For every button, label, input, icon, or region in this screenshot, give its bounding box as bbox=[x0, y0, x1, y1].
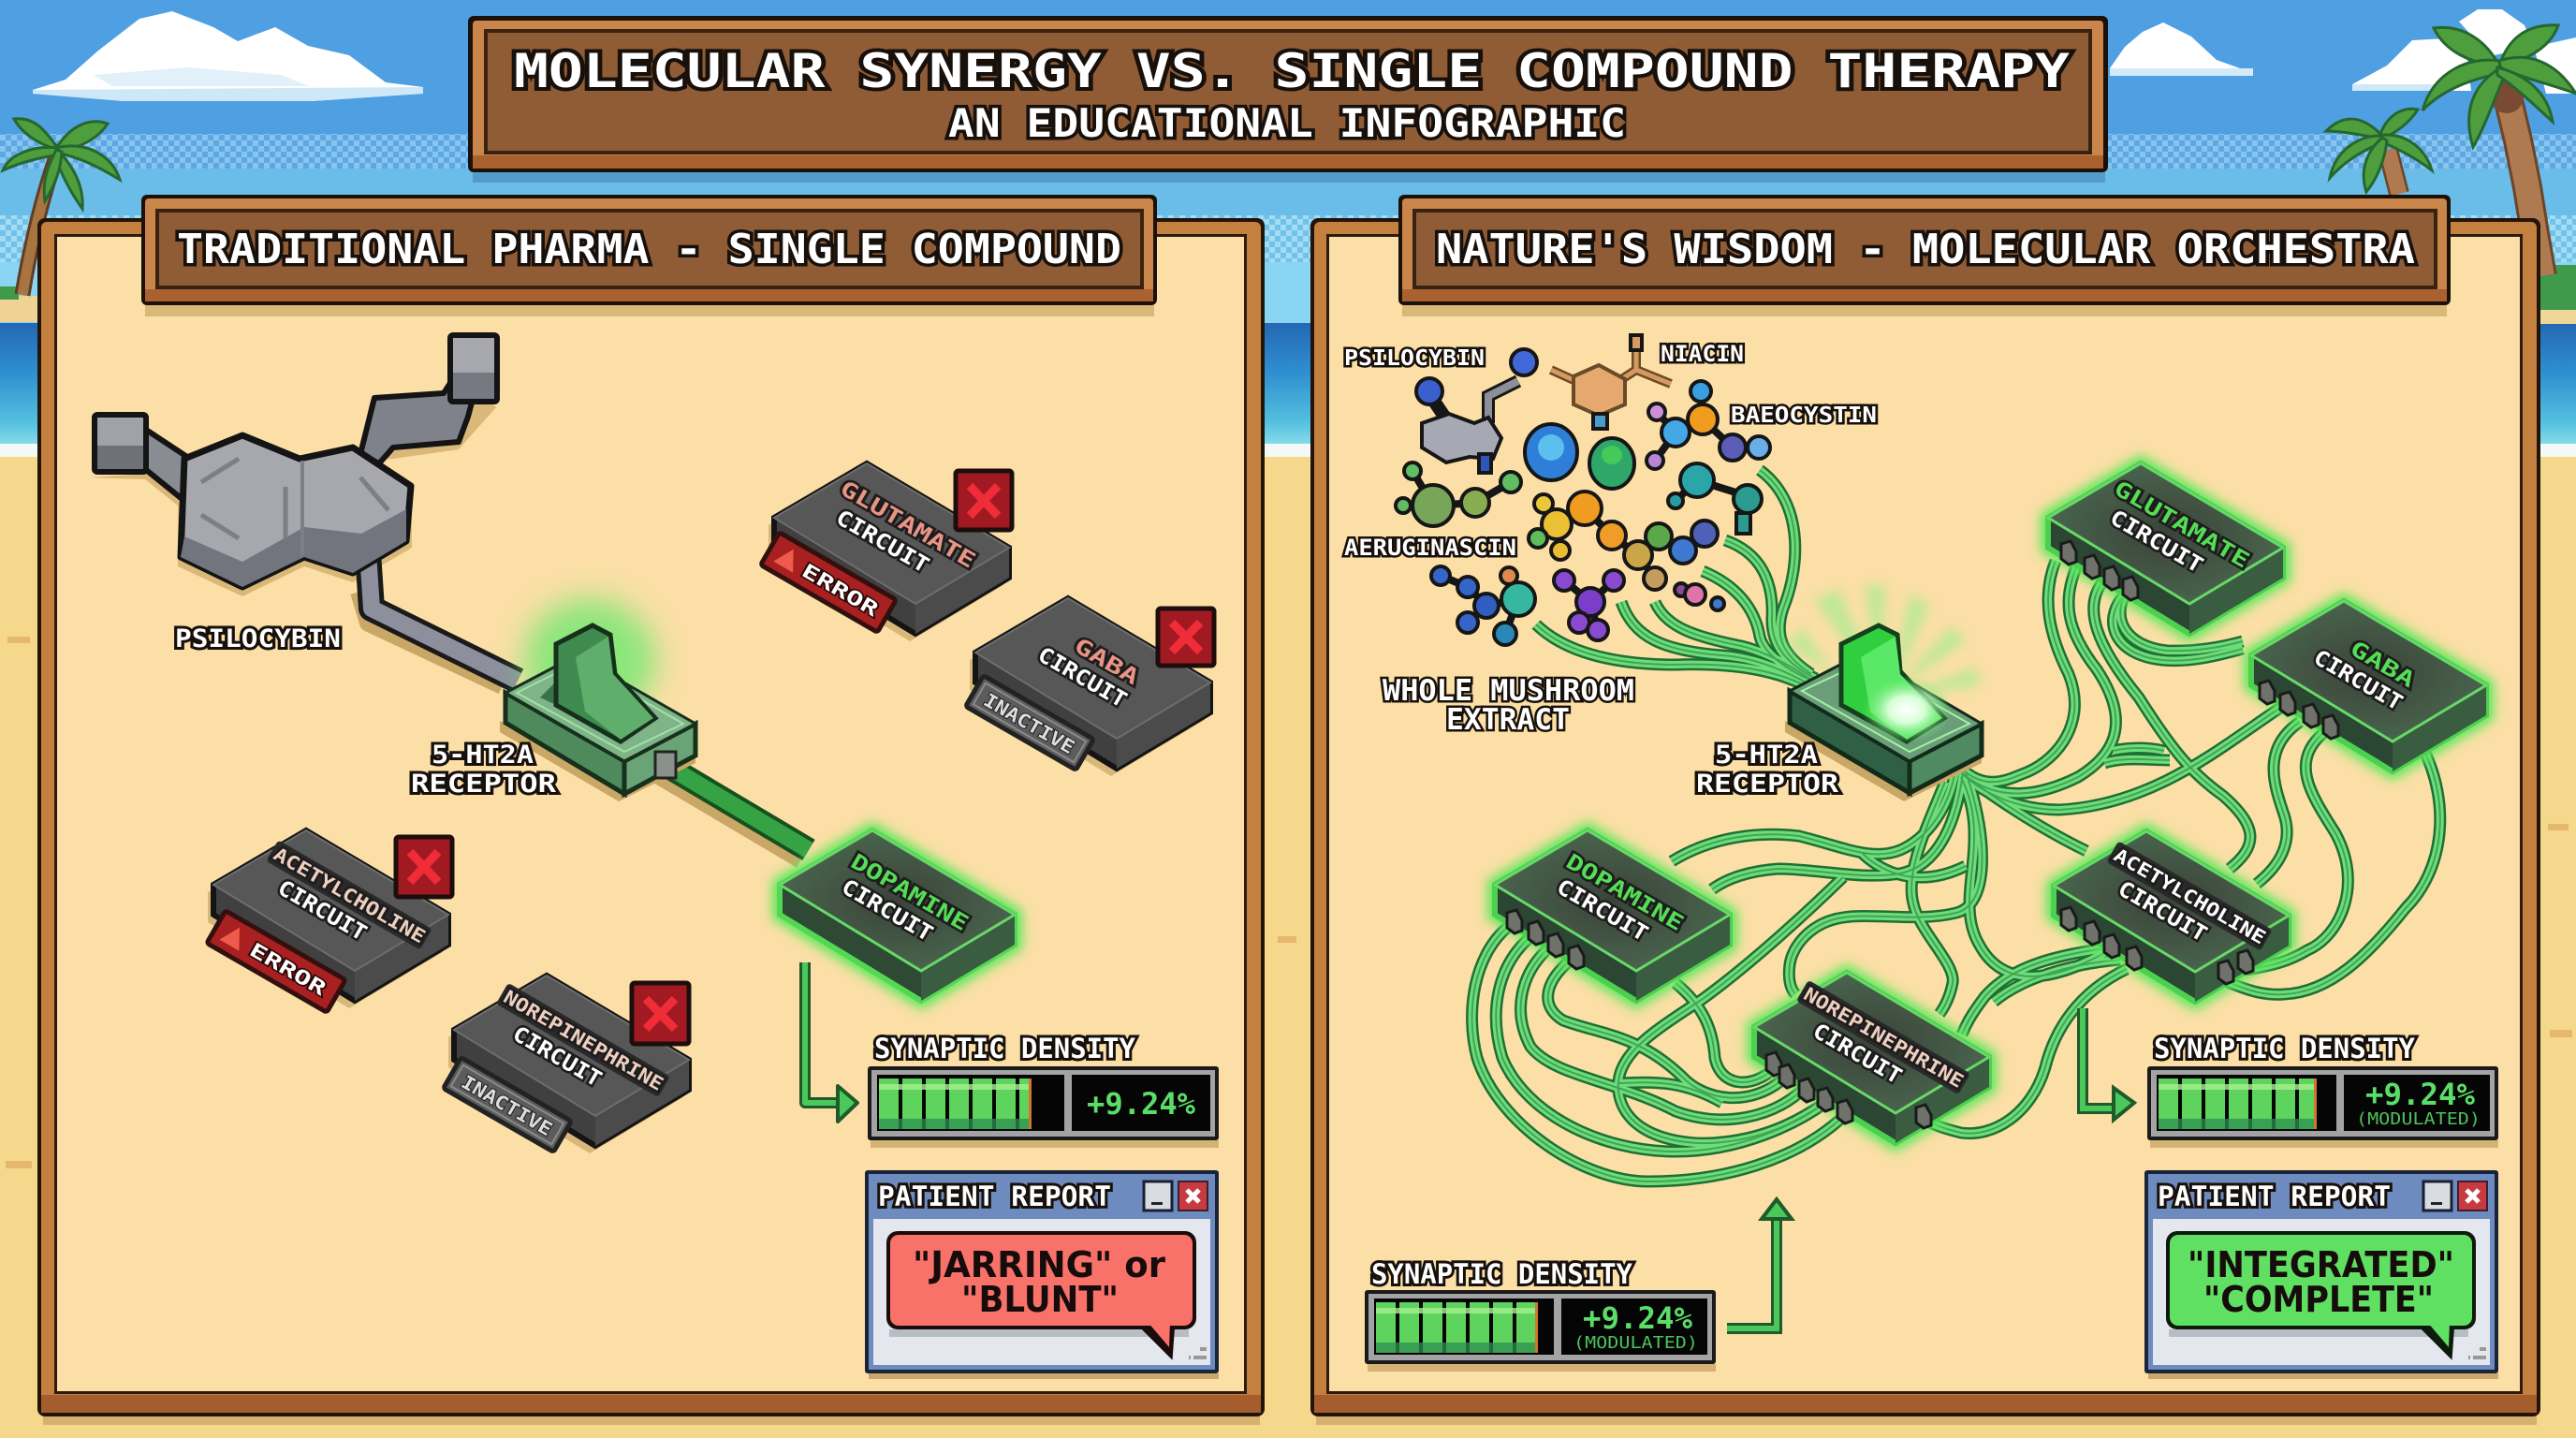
circuit: gaba inactive bbox=[966, 598, 1214, 776]
circuit: gaba active bbox=[2251, 601, 2486, 771]
panel header: traditional pharma: TRADITIONAL PHARMA - SINGLE COMPOUND bbox=[177, 226, 1121, 273]
circuit: acetylcholine inactive: CIRCUIT bbox=[273, 876, 371, 946]
circuit: norepinephrine inactive: NOREPINEPHRINE bbox=[500, 986, 667, 1095]
subtitle text: AN EDUCATIONAL INFOGRAPHIC bbox=[948, 100, 1626, 146]
circuit: dopamine active bbox=[780, 830, 1015, 1001]
arrow: to synaptic density right bbox=[2083, 1008, 2134, 1120]
tag: error: ERROR bbox=[798, 559, 883, 622]
icon: minimize button bbox=[2423, 1181, 2452, 1211]
circuit: norepinephrine inactive: CIRCUIT bbox=[508, 1022, 606, 1093]
icon: red x bbox=[1158, 609, 1214, 666]
molecule: teal and blue cluster bbox=[1431, 566, 1535, 645]
speech bubble: integrated complete bbox=[2166, 1231, 2476, 1354]
circuit: acetylcholine inactive bbox=[207, 830, 452, 1012]
value: +9.24%: +9.24% bbox=[1087, 1086, 1196, 1122]
synaptic density meter: modulated right bbox=[2147, 1033, 2498, 1148]
molecule: psilocybin single compound bbox=[89, 335, 518, 685]
value: +9.24% modulated: (MODULATED) bbox=[1573, 1333, 1698, 1353]
molecule: psilocybin gray bbox=[1416, 349, 1537, 473]
arrow: up from lower synaptic density bbox=[1727, 1199, 1792, 1328]
synaptic density meter bbox=[868, 1033, 1219, 1148]
molecule: niacin tan bbox=[1551, 335, 1671, 429]
synaptic density meter: modulated lower bbox=[1365, 1258, 1716, 1372]
circuit: dopamine active bbox=[1495, 830, 1730, 1001]
cloud: right large bbox=[2352, 9, 2576, 94]
speech bubble: jarring or blunt: "BLUNT" bbox=[961, 1279, 1119, 1320]
label: synaptic density: SYNAPTIC DENSITY bbox=[2154, 1033, 2416, 1064]
label: niacin: NIACIN bbox=[1661, 341, 1744, 367]
patient report window: integrated bbox=[2144, 1170, 2498, 1379]
panel header: nature's wisdom: NATURE'S WISDOM - MOLECULAR ORCHESTRA bbox=[1436, 226, 2415, 273]
cloud: left bbox=[33, 11, 423, 101]
circuit: glutamate active: CIRCUIT bbox=[2105, 506, 2207, 579]
arrow: dopamine to synaptic density bbox=[805, 962, 857, 1122]
molecule: purple cluster bbox=[1554, 570, 1624, 640]
circuit: glutamate inactive bbox=[761, 463, 1012, 641]
speech bubble: integrated complete: "INTEGRATED" bbox=[2188, 1244, 2454, 1285]
panel: nature's wisdom bbox=[1310, 195, 2540, 1425]
label: baeocystin: BAEOCYSTIN bbox=[1731, 404, 1877, 428]
label: whole mushroom extract bbox=[1383, 674, 1634, 737]
palm tree: right large bbox=[2422, 25, 2576, 276]
tag: error bbox=[207, 911, 345, 1012]
palm tree: left bbox=[3, 119, 120, 295]
receptor switch: single compound bbox=[500, 599, 695, 801]
wire network: green pathways bbox=[1472, 470, 2440, 1181]
tag: inactive bbox=[444, 1058, 571, 1152]
circuit: glutamate inactive: CIRCUIT bbox=[831, 506, 933, 579]
circuit: acetylcholine active: ACETYLCHOLINE bbox=[2110, 844, 2270, 948]
label: 5-HT2A receptor: 5-HT2A bbox=[1715, 741, 1818, 770]
connector: active green tube bbox=[659, 765, 809, 859]
panel header: nature's wisdom bbox=[1398, 195, 2451, 316]
circuit: gaba active: GABA bbox=[2346, 637, 2419, 693]
circuit: norepinephrine active: CIRCUIT bbox=[1808, 1020, 1906, 1090]
molecule: yellow orange chain bbox=[1529, 492, 1718, 590]
panel header: traditional pharma bbox=[141, 195, 1157, 316]
value: +9.24% modulated bbox=[1573, 1300, 1698, 1353]
circuit: norepinephrine active: NOREPINEPHRINE bbox=[1800, 983, 1968, 1093]
speech bubble: integrated complete: "COMPLETE" bbox=[2203, 1279, 2434, 1320]
label: whole mushroom extract: EXTRACT bbox=[1446, 703, 1570, 737]
palm tree: right small bbox=[2326, 109, 2432, 194]
molecule: baeocystin cluster bbox=[1647, 381, 1770, 469]
circuit: glutamate active: GLUTAMATE bbox=[2110, 477, 2253, 574]
circuit: norepinephrine active bbox=[1754, 973, 1989, 1143]
icon: red x bbox=[632, 983, 689, 1044]
label: 5-HT2A receptor: RECEPTOR bbox=[1696, 770, 1839, 799]
icon: close button bbox=[1178, 1181, 1208, 1211]
label: synaptic density: SYNAPTIC DENSITY bbox=[1371, 1258, 1633, 1290]
label: psilocybin: PSILOCYBIN bbox=[1344, 346, 1485, 371]
speech bubble: jarring or blunt: "JARRING" or bbox=[913, 1244, 1165, 1285]
speech bubble: jarring or blunt bbox=[886, 1231, 1196, 1354]
tag: inactive bbox=[966, 676, 1093, 770]
circuit: dopamine active: DOPAMINE bbox=[1561, 850, 1688, 936]
molecule: blue and green blobs bbox=[1525, 424, 1634, 489]
icon: red x bbox=[396, 837, 452, 897]
circuit: glutamate inactive: GLUTAMATE bbox=[836, 477, 979, 574]
label: 5-HT2A receptor bbox=[411, 741, 557, 799]
circuit: dopamine active: DOPAMINE bbox=[846, 850, 973, 936]
value: +9.24% modulated: +9.24% bbox=[2365, 1077, 2476, 1112]
circuit: acetylcholine active: CIRCUIT bbox=[2114, 877, 2211, 947]
window title: PATIENT REPORT bbox=[2158, 1181, 2391, 1212]
cloud: right small bbox=[2110, 22, 2253, 76]
value: +9.24% modulated: (MODULATED) bbox=[2356, 1109, 2481, 1129]
icon: close button bbox=[2458, 1181, 2487, 1211]
tag: error bbox=[761, 533, 896, 632]
circuit: gaba inactive: GABA bbox=[1070, 634, 1143, 690]
icon: minimize button bbox=[1144, 1181, 1172, 1211]
label: synaptic density: SYNAPTIC DENSITY bbox=[874, 1033, 1136, 1064]
circuit: gaba inactive: CIRCUIT bbox=[1033, 643, 1131, 713]
patient report window: jarring bbox=[865, 1170, 1219, 1379]
molecule: small pink cluster bbox=[1675, 583, 1724, 610]
molecule: aeruginascin green bbox=[1396, 462, 1521, 526]
label: psilocybin: PSILOCYBIN bbox=[175, 624, 341, 653]
circuit: acetylcholine active bbox=[2054, 831, 2289, 1002]
label: 5-HT2A receptor bbox=[1696, 741, 1839, 799]
label: aeruginascin: AERUGINASCIN bbox=[1344, 535, 1516, 561]
tag: inactive: INACTIVE bbox=[458, 1070, 556, 1140]
value: +9.24% modulated bbox=[2356, 1077, 2481, 1129]
tag: error: ERROR bbox=[246, 938, 330, 1001]
molecule: teal cluster bbox=[1668, 463, 1762, 534]
receptor switch: glowing bbox=[1785, 585, 1982, 801]
value: +9.24% modulated: +9.24% bbox=[1583, 1300, 1693, 1336]
circuit: norepinephrine inactive bbox=[444, 976, 689, 1153]
label: 5-HT2A receptor: 5-HT2A bbox=[432, 741, 534, 770]
label: whole mushroom extract: WHOLE MUSHROOM bbox=[1383, 674, 1634, 708]
panel: traditional pharma bbox=[37, 195, 1265, 1425]
circuit: dopamine active: CIRCUIT bbox=[1552, 875, 1652, 946]
window title: PATIENT REPORT bbox=[878, 1181, 1111, 1212]
title text: MOLECULAR SYNERGY VS. SINGLE COMPOUND THERAPY bbox=[514, 44, 2070, 98]
circuit: gaba active: CIRCUIT bbox=[2309, 646, 2407, 716]
tag: inactive: INACTIVE bbox=[980, 688, 1078, 758]
icon: red x bbox=[956, 471, 1012, 530]
circuit: dopamine active: CIRCUIT bbox=[837, 875, 937, 946]
label: 5-HT2A receptor: RECEPTOR bbox=[411, 770, 557, 799]
title banner bbox=[468, 16, 2108, 183]
circuit: glutamate active bbox=[2048, 463, 2283, 634]
circuit: acetylcholine inactive: ACETYLCHOLINE bbox=[270, 843, 430, 947]
